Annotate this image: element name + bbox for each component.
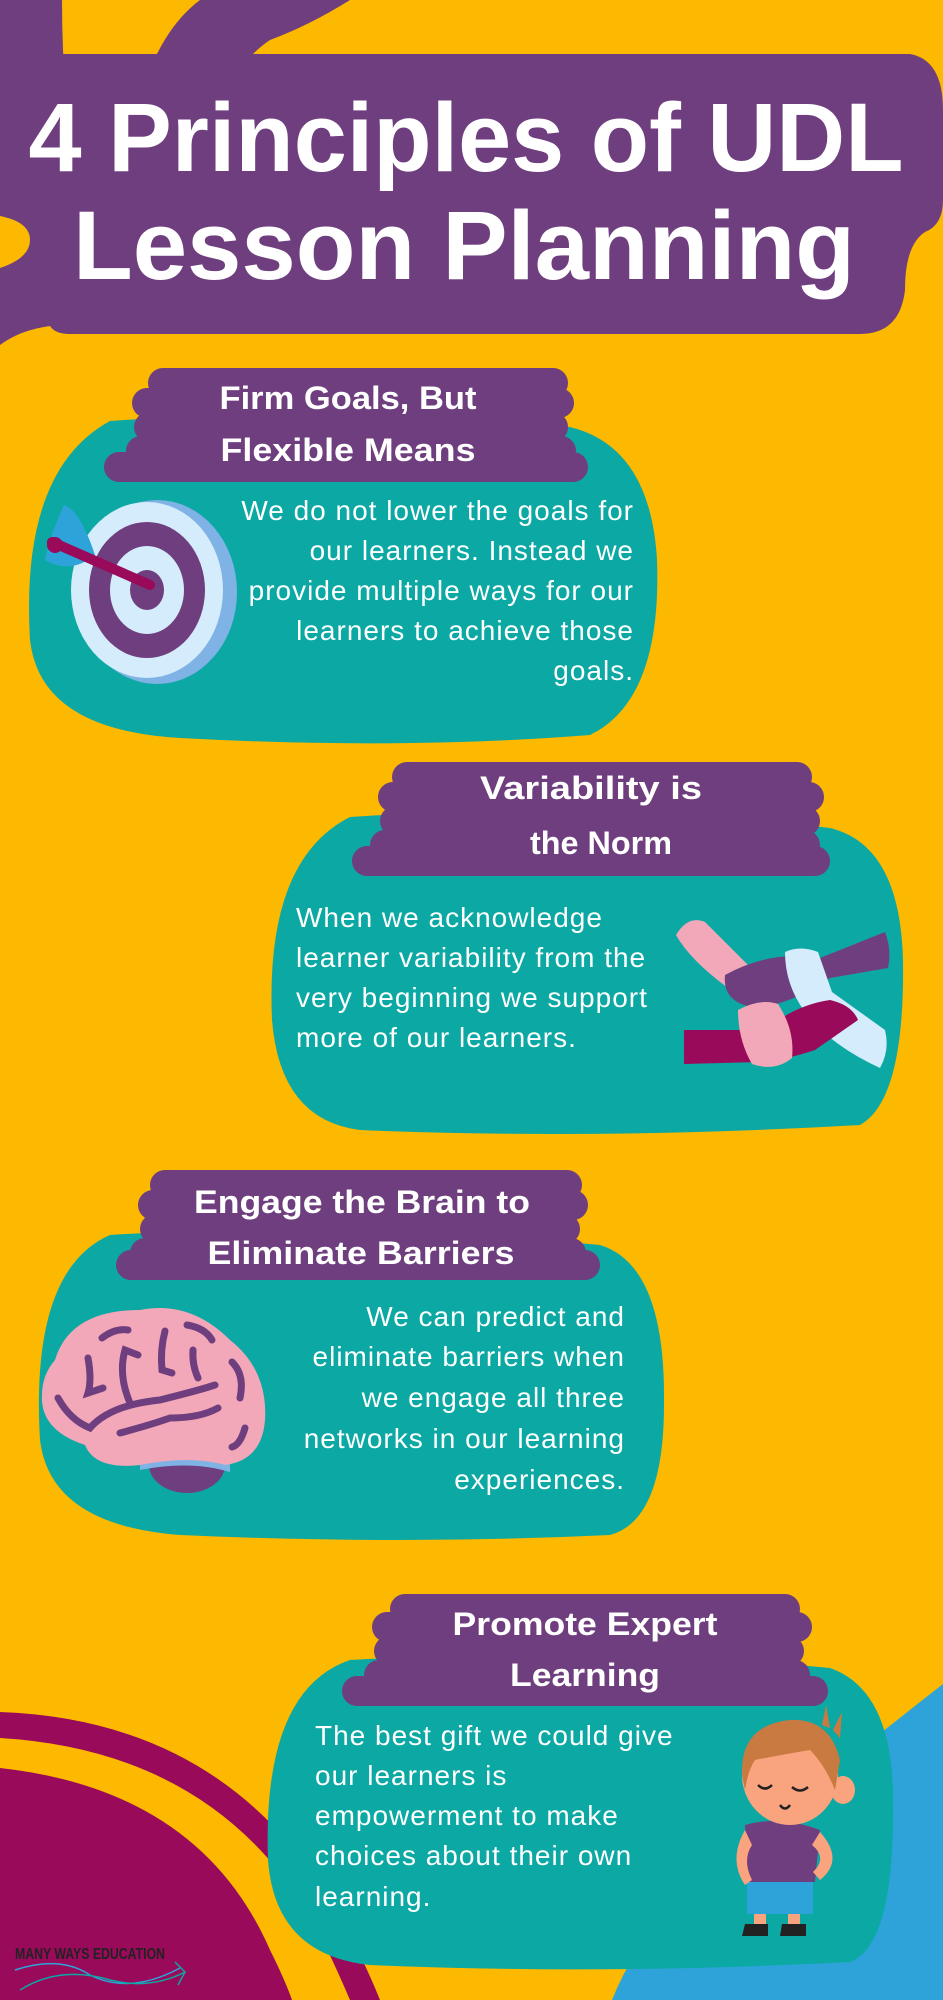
heading brush <box>116 1170 600 1280</box>
text block: The best gift we could give <box>315 1720 674 1751</box>
logo: MANY WAYS EDUCATION <box>15 1946 165 1963</box>
text block: learning. <box>315 1881 431 1912</box>
text block <box>296 902 648 1053</box>
text block: We can predict and <box>366 1301 625 1332</box>
title text: 4 Principles of UDL <box>28 83 904 192</box>
heading brush <box>352 762 830 876</box>
text block: our learners. Instead we <box>310 535 634 566</box>
panel: variability <box>271 762 903 1134</box>
background: top-left purple blob <box>0 0 350 98</box>
text block: experiences. <box>454 1464 625 1495</box>
heading text: Promote Expert <box>452 1606 718 1642</box>
text block: We do not lower the goals for <box>241 495 634 526</box>
text block: choices about their own <box>315 1840 632 1871</box>
text block: When we acknowledge <box>296 902 603 933</box>
heading text: Variability is <box>480 770 702 806</box>
text block: we engage all three <box>361 1382 625 1413</box>
text block: learners to achieve those <box>296 615 634 646</box>
panel: engage the brain: Eliminate Barriers <box>208 1235 514 1271</box>
panel: firm goals: Flexible Means <box>220 432 476 468</box>
text block <box>241 495 634 686</box>
panel: expert learning: Learning <box>510 1657 660 1693</box>
icon: hands <box>676 920 889 1068</box>
text block: our learners is <box>315 1760 507 1791</box>
heading text: Firm Goals, But <box>220 380 477 416</box>
text block: very beginning we support <box>296 982 648 1013</box>
icon: target <box>45 500 237 684</box>
text block: networks in our learning <box>304 1423 625 1454</box>
panel: expert learning <box>268 1594 893 1969</box>
text block: empowerment to make <box>315 1800 619 1831</box>
heading brush <box>104 368 588 482</box>
title panel <box>0 54 943 345</box>
title panel: Lesson Planning <box>73 191 855 300</box>
heading brush <box>342 1594 828 1706</box>
panel: firm goals <box>29 368 657 743</box>
text block <box>304 1301 625 1495</box>
panel: variability: the Norm <box>530 825 672 861</box>
background: blue shape bottom-right <box>612 1684 943 2000</box>
background: magenta arcs bottom-left <box>0 1712 380 2000</box>
text block <box>315 1720 674 1912</box>
text block: provide multiple ways for our <box>249 575 634 606</box>
text block: eliminate barriers when <box>313 1341 625 1372</box>
panel: engage the brain <box>39 1170 664 1540</box>
icon: brain <box>42 1308 265 1493</box>
icon: boy <box>736 1705 855 1936</box>
text block: goals. <box>553 655 634 686</box>
text block: more of our learners. <box>296 1022 577 1053</box>
text block: learner variability from the <box>296 942 646 973</box>
heading text: Engage the Brain to <box>194 1184 530 1220</box>
logo <box>15 1946 185 1990</box>
